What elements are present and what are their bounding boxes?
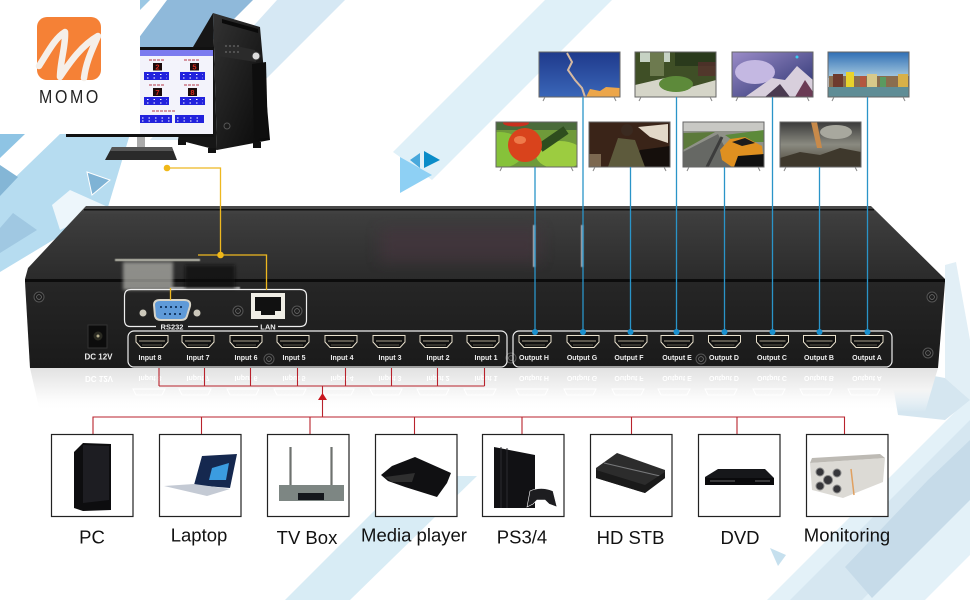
source device: DVD <box>698 434 780 548</box>
control software panels: 8 <box>190 88 195 97</box>
TV: racing car (Output D) <box>683 122 764 171</box>
source device: HD STB <box>590 434 672 548</box>
source device: DVD: DVD <box>720 527 760 548</box>
panel: HDMI outputs: Output A <box>852 355 882 362</box>
panel: control ports <box>124 290 306 332</box>
TV: garden (Output E) <box>635 52 716 101</box>
panel: HDMI inputs: Input 4 <box>331 355 354 362</box>
panel: HDMI outputs: Output C <box>757 355 787 362</box>
LAN jack <box>251 293 285 319</box>
logo: MOMO <box>0 0 140 134</box>
chassis reflection on floor: Output H <box>519 374 549 381</box>
blue output connection lines <box>532 97 870 335</box>
panel: HDMI inputs: Input 2 <box>427 355 450 362</box>
DC 12V power jack: DC 12V <box>84 352 113 362</box>
control software panels: 5 <box>192 63 197 72</box>
brand name: MOMO <box>39 87 101 107</box>
chassis reflection on floor: Output F <box>614 374 644 381</box>
panel: HDMI inputs <box>128 331 507 367</box>
DC 12V power jack <box>84 325 113 362</box>
chassis reflection on floor: Input 5 <box>283 374 306 381</box>
chassis reflection on floor <box>30 368 938 412</box>
reflections on the top panel <box>115 225 584 290</box>
chassis reflection on floor: Input 3 <box>379 374 402 381</box>
decorative triangle logo mark <box>400 151 440 193</box>
chassis reflection on floor: Input 4 <box>331 374 354 381</box>
chassis reflection on floor: Input 2 <box>427 374 450 381</box>
yellow control connection lines <box>164 165 266 300</box>
panel: HDMI inputs: Input 5 <box>283 355 306 362</box>
source device: HD STB: HD STB <box>597 527 664 548</box>
panel: HDMI outputs <box>513 331 892 367</box>
TV: fire tornado (Output B) <box>780 122 861 171</box>
icon: orange M mark <box>37 17 101 80</box>
panel: HDMI outputs: Output H <box>519 355 549 362</box>
LAN label: LAN <box>260 322 276 332</box>
chassis front panel <box>25 282 945 368</box>
TV: tomato (Output H) <box>496 122 578 172</box>
source device: Media player: Media player <box>361 524 467 546</box>
screws <box>34 292 937 364</box>
HDMI matrix switcher chassis <box>25 206 945 368</box>
chassis reflection on floor: Input 8 <box>139 374 162 381</box>
TV: lightning (Output G) <box>539 52 620 101</box>
source device: Media player <box>361 434 467 546</box>
chassis reflection on floor: Output C <box>757 374 787 381</box>
panel: HDMI inputs: Input 1 <box>475 355 498 362</box>
panel: HDMI inputs: Input 7 <box>187 355 210 362</box>
chassis top panel <box>25 206 945 279</box>
chassis reflection on floor: Input 7 <box>187 374 210 381</box>
panel: HDMI inputs: Input 3 <box>379 355 402 362</box>
panel: HDMI inputs: Input 8 <box>139 355 162 362</box>
control software panels: 7 <box>155 88 160 97</box>
chassis reflection on floor: Output G <box>567 374 598 381</box>
source device: Monitoring camera: Monitoring <box>804 524 890 546</box>
chassis reflection on floor: Input 6 <box>235 374 258 381</box>
source device: PC <box>52 434 133 548</box>
TV: pianist (Output F) <box>589 122 670 171</box>
red input connection lines with arrow <box>93 368 844 434</box>
source device: PS3/4: PS3/4 <box>497 526 547 548</box>
source device: Laptop: Laptop <box>171 524 227 546</box>
RS232 label: RS232 <box>161 322 183 332</box>
panel: HDMI outputs: Output E <box>662 355 692 362</box>
source device: TV Box: TV Box <box>277 527 338 548</box>
chassis reflection on floor: Input 1 <box>475 374 498 381</box>
monitor with control software <box>66 47 214 160</box>
panel: HDMI outputs: Output G <box>567 355 598 362</box>
TV: snowy mountain (Output C) <box>732 52 813 101</box>
panel: HDMI outputs: Output F <box>614 355 644 362</box>
panel: HDMI outputs: Output B <box>804 355 834 362</box>
source device: PC: PC <box>79 526 105 548</box>
source device: TV Box <box>268 434 349 548</box>
chassis reflection on floor: Output E <box>662 374 692 381</box>
panel: HDMI outputs: Output D <box>709 355 739 362</box>
chassis reflection on floor: Output A <box>852 374 882 381</box>
computer tower <box>178 13 270 153</box>
source device: Laptop <box>160 434 241 546</box>
TV: waterfront city (Output A) <box>828 52 909 101</box>
panel: HDMI inputs: Input 6 <box>235 355 258 362</box>
chassis reflection on floor: Output B <box>804 374 834 381</box>
chassis reflection on floor: DC 12V <box>85 374 114 383</box>
control software panels: 2 <box>155 63 160 72</box>
control software panels <box>140 60 205 123</box>
chassis reflection on floor: Output D <box>709 374 739 381</box>
source device: PS3/4 <box>482 434 564 548</box>
RS232 connector <box>138 300 202 320</box>
source device: Monitoring camera <box>804 434 890 546</box>
